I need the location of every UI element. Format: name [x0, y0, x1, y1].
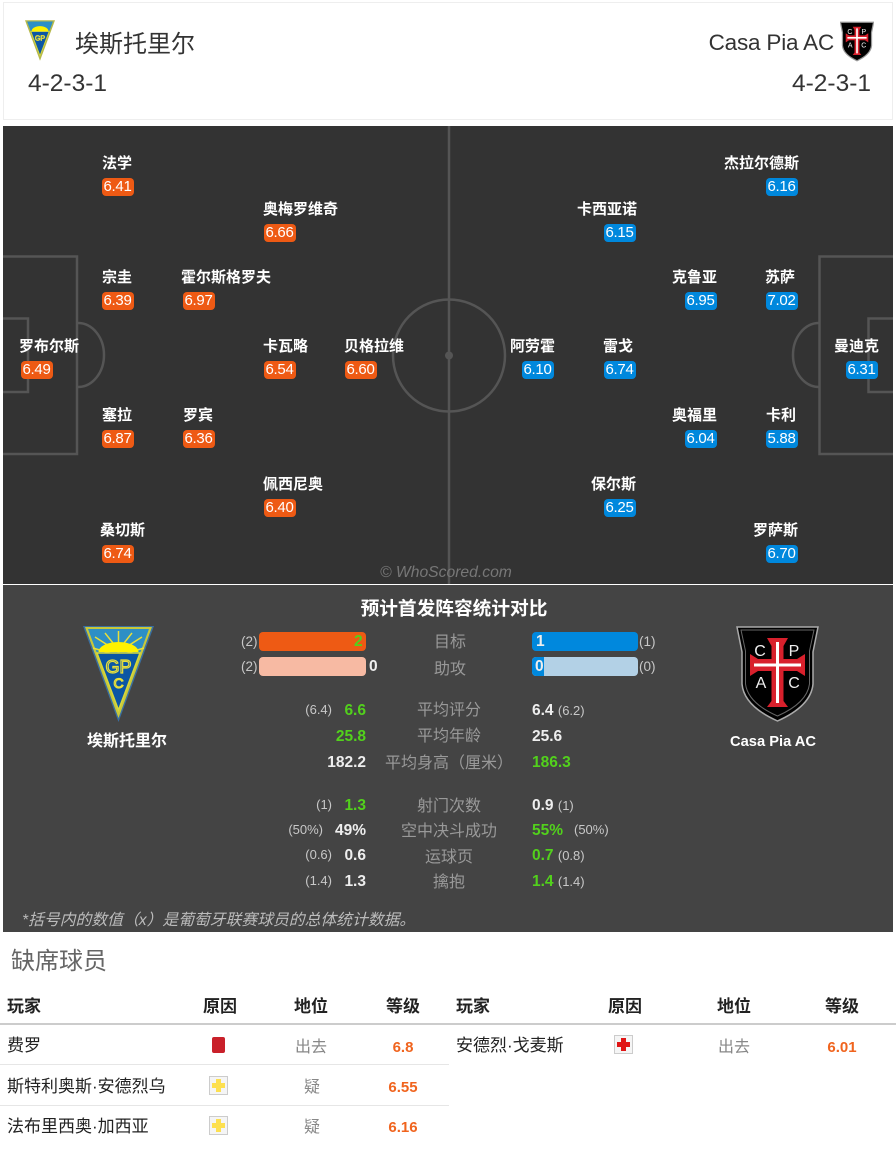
icon: Casa Pia crest small: A	[848, 43, 853, 50]
player: 曼迪克: 6.31	[848, 361, 876, 378]
away height: 186.3	[532, 754, 571, 771]
player: 卡西亚诺	[577, 201, 637, 242]
row: 法布里西奥·加西亚: 疑	[304, 1119, 320, 1136]
away formation: 4-2-3-1	[792, 70, 871, 97]
height label: 平均身高（厘米）	[385, 755, 513, 772]
player: 苏萨	[765, 269, 798, 310]
tackles label: 擒抱	[433, 874, 465, 891]
player: 桑切斯: 6.74	[104, 545, 132, 562]
player: 罗宾	[183, 407, 215, 448]
dribbles label: 运球页	[425, 849, 473, 866]
home goals bar	[259, 632, 366, 651]
goals row	[241, 632, 656, 651]
stat: shots	[316, 797, 574, 815]
home team label: 埃斯托里尔	[87, 733, 167, 750]
player: 奥梅罗维奇: 奥梅罗维奇	[263, 201, 338, 218]
away assists bar	[532, 657, 638, 676]
player: 卡西亚诺: 卡西亚诺	[577, 201, 637, 218]
icon: red card	[212, 1037, 225, 1053]
player: 贝格拉维: 6.60	[346, 361, 374, 378]
row: 安德烈·戈麦斯: 6.01	[827, 1039, 857, 1056]
player: 杰拉尔德斯: 6.16	[768, 178, 796, 195]
player: 奥福里: 6.04	[686, 430, 714, 447]
icon: Casa Pia crest small: P	[861, 29, 866, 36]
player: 桑切斯: 桑切斯	[100, 522, 145, 539]
row: 斯特利奥斯·安德烈乌: 6.55	[388, 1079, 418, 1096]
table: missing players right	[449, 990, 896, 1162]
stats title: 预计首发阵容统计对比	[361, 598, 547, 619]
player: 卡瓦略	[263, 338, 308, 379]
row: 斯特利奥斯·安德烈乌: 斯特利奥斯·安德烈乌	[7, 1077, 166, 1096]
home goals value: 2	[354, 633, 363, 650]
home formation: 4-2-3-1	[28, 70, 107, 97]
icon: Casa Pia crest large: P	[789, 643, 799, 660]
icon: yellow cross	[209, 1116, 228, 1135]
row: 法布里西奥·加西亚: 6.16	[388, 1119, 418, 1136]
home age: 25.8	[336, 728, 366, 745]
away aerial: 55%	[532, 822, 563, 839]
icon: Estoril crest large	[83, 626, 154, 722]
player: 苏萨: 苏萨	[765, 269, 795, 286]
away dribbles and prior: 0.7 (0.8)	[532, 847, 585, 864]
icon: Casa Pia crest small	[840, 22, 874, 62]
aerial label: 空中决斗成功	[401, 823, 497, 840]
player: 宗圭: 6.39	[104, 292, 132, 309]
home team name: 埃斯托里尔	[75, 31, 195, 58]
player: 宗圭: 宗圭	[102, 269, 132, 286]
icon: red cross	[614, 1035, 633, 1054]
player: 阿劳霍: 6.10	[524, 361, 552, 378]
row: 费罗: 出去	[295, 1039, 327, 1056]
player: 保尔斯: 保尔斯	[591, 476, 636, 493]
icon: Casa Pia crest large	[736, 626, 819, 722]
home rating: 6.6	[344, 702, 366, 719]
table header	[0, 990, 449, 1024]
icon: Casa Pia crest small: C	[847, 29, 852, 36]
home assists bar	[259, 657, 366, 676]
player: 罗布尔斯	[19, 338, 79, 379]
table header: 玩家	[7, 997, 41, 1016]
away players	[510, 155, 879, 563]
player: 卡瓦略: 6.54	[266, 361, 294, 378]
away shots and prior: 0.9 (1)	[532, 797, 574, 814]
player: 奥福里	[672, 407, 717, 448]
player: 贝格拉维: 贝格拉维	[344, 338, 404, 355]
player: 曼迪克	[834, 338, 879, 379]
player: 克鲁亚: 克鲁亚	[672, 269, 717, 286]
row: 费罗: 6.8	[393, 1039, 413, 1056]
player: 罗萨斯: 罗萨斯	[753, 522, 798, 539]
player: 阿劳霍	[510, 338, 555, 379]
row: 安德烈·戈麦斯	[449, 1025, 896, 1064]
shots label: 射门次数	[417, 798, 481, 815]
stat: aerial duels	[288, 822, 609, 840]
player: 卡利: 卡利	[766, 407, 796, 424]
icon: Estoril crest small: GP	[35, 34, 45, 42]
player: 罗布尔斯: 罗布尔斯	[19, 338, 79, 355]
player: 贝格拉维	[344, 338, 404, 379]
player: 卡西亚诺: 6.15	[606, 224, 634, 241]
table header: 原因	[608, 997, 642, 1016]
player: 塞拉: 6.87	[104, 430, 132, 447]
icon: Casa Pia crest large: C	[788, 675, 800, 692]
row: 费罗	[0, 1025, 449, 1064]
player: 塞拉	[102, 407, 134, 448]
player: 罗萨斯	[753, 522, 798, 563]
player: 佩西尼奥	[263, 476, 323, 517]
player: 罗宾: 罗宾	[183, 407, 213, 424]
table: missing players left	[0, 990, 449, 1162]
row: 斯特利奥斯·安德烈乌	[0, 1065, 449, 1105]
away assists value: 0	[535, 658, 544, 675]
icon: Casa Pia crest small: C	[861, 43, 866, 50]
watermark: © WhoScored.com	[380, 564, 512, 581]
home prior assists: (2)	[241, 659, 258, 674]
header panel	[3, 2, 893, 120]
player: 法学: 法学	[102, 155, 132, 172]
home prior dribbles: (0.6)	[305, 847, 332, 862]
player: 保尔斯: 6.25	[606, 499, 634, 516]
icon: Casa Pia crest large: C	[754, 643, 766, 660]
player: 克鲁亚: 6.95	[686, 292, 714, 309]
age label: 平均年龄	[417, 728, 481, 745]
table header: 原因	[203, 997, 237, 1016]
player: 雷戈: 6.74	[606, 361, 634, 378]
table header	[449, 990, 896, 1024]
icon: Estoril crest large: GP	[105, 657, 132, 677]
home shots: 1.3	[344, 797, 366, 814]
row: 费罗: 费罗	[7, 1036, 41, 1055]
player: 罗布尔斯: 6.49	[22, 361, 50, 378]
player: 克鲁亚	[672, 269, 717, 310]
player: 雷戈: 雷戈	[603, 338, 633, 355]
player: 宗圭	[102, 269, 134, 310]
away prior assists: (0)	[639, 659, 656, 674]
player: 奥福里: 奥福里	[672, 407, 717, 424]
assists label: 助攻	[434, 661, 466, 678]
row: 法布里西奥·加西亚: 法布里西奥·加西亚	[7, 1117, 149, 1136]
away tackles and prior: 1.4 (1.4)	[532, 873, 585, 890]
assists row	[241, 657, 656, 678]
home assists value: 0	[369, 658, 378, 675]
home prior tackles: (1.4)	[305, 873, 332, 888]
away rating and prior: 6.4 (6.2)	[532, 702, 585, 719]
away prior goals: (1)	[639, 634, 656, 649]
away prior aerial: (50%)	[574, 822, 609, 837]
away goals bar	[532, 632, 638, 651]
away team label: Casa Pia AC	[730, 734, 816, 750]
player: 阿劳霍: 阿劳霍	[510, 338, 555, 355]
icon: Estoril crest small	[25, 20, 55, 61]
row: 安德烈·戈麦斯: 出去	[718, 1039, 750, 1056]
player: 苏萨: 7.02	[768, 292, 796, 309]
player: 杰拉尔德斯: 杰拉尔德斯	[724, 155, 799, 172]
stat: dribbles	[305, 847, 585, 866]
home prior aerial: (50%)	[288, 822, 323, 837]
home height: 182.2	[327, 754, 366, 771]
player: 法学	[102, 155, 134, 196]
missing players heading: 缺席球员	[11, 948, 107, 975]
home tackles: 1.3	[344, 873, 366, 890]
home players	[19, 155, 404, 563]
stat: average rating	[305, 701, 585, 719]
player: 曼迪克: 曼迪克	[834, 338, 879, 355]
home aerial: 49%	[335, 822, 366, 839]
player: 塞拉: 塞拉	[102, 407, 132, 424]
player: 奥梅罗维奇: 6.66	[266, 224, 294, 241]
goals label: 目标	[434, 634, 466, 651]
panel: lineup stats comparison	[3, 585, 893, 932]
table header: 等级	[386, 997, 420, 1016]
row: 斯特利奥斯·安德烈乌: 疑	[304, 1079, 320, 1096]
player: 霍尔斯格罗夫: 6.97	[184, 292, 212, 309]
row: 安德烈·戈麦斯: 安德烈·戈麦斯	[456, 1036, 564, 1055]
table header: 地位	[294, 997, 328, 1016]
table header: 地位	[717, 997, 751, 1016]
panel: pitch	[3, 126, 893, 584]
home dribbles: 0.6	[344, 847, 366, 864]
player: 杰拉尔德斯	[724, 155, 799, 196]
player: 奥梅罗维奇	[263, 201, 338, 242]
stat: tackles	[305, 873, 585, 891]
stat: average age	[336, 727, 562, 745]
table header: 等级	[825, 997, 859, 1016]
icon: yellow cross	[209, 1076, 228, 1095]
player: 霍尔斯格罗夫: 霍尔斯格罗夫	[181, 269, 271, 286]
player: 佩西尼奥: 6.40	[266, 499, 294, 516]
stat: average height	[327, 754, 571, 772]
away goals value: 1	[536, 633, 545, 650]
player: 罗宾: 6.36	[184, 430, 212, 447]
home prior rating: (6.4)	[305, 702, 332, 717]
table header: 玩家	[456, 997, 490, 1016]
player: 卡利: 5.88	[768, 430, 796, 447]
icon: Casa Pia crest large: A	[756, 675, 767, 692]
player: 法学: 6.41	[104, 178, 132, 195]
player: 卡利	[766, 407, 798, 448]
player: 卡瓦略: 卡瓦略	[263, 338, 308, 355]
away team name: Casa Pia AC	[709, 30, 834, 55]
icon: Estoril crest large: C	[113, 675, 124, 691]
player: 桑切斯	[100, 522, 145, 563]
player: 佩西尼奥: 佩西尼奥	[263, 476, 323, 493]
footnote: *括号内的数值（x）是葡萄牙联赛球员的总体统计数据。	[22, 912, 415, 929]
rating label: 平均评分	[417, 702, 481, 719]
player: 罗萨斯: 6.70	[768, 545, 796, 562]
player: 霍尔斯格罗夫	[181, 269, 271, 310]
player: 保尔斯	[591, 476, 636, 517]
home prior goals: (2)	[241, 634, 258, 649]
home prior shots: (1)	[316, 797, 332, 812]
away age: 25.6	[532, 728, 562, 745]
row: 法布里西奥·加西亚	[0, 1106, 449, 1146]
player: 雷戈	[603, 338, 636, 379]
